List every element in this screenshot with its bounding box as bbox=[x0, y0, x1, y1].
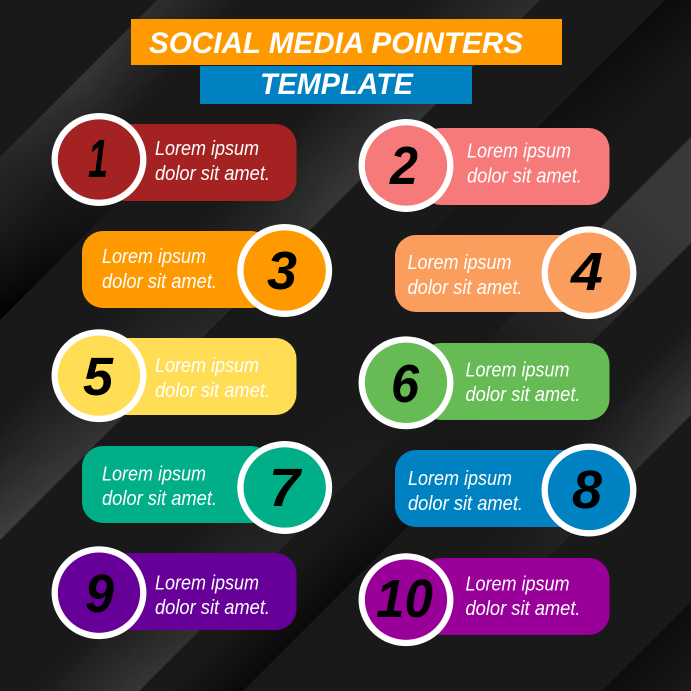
pointer 6 bbox=[362, 340, 610, 426]
pointer 2: Lorem ipsum bbox=[467, 140, 571, 162]
pointer 8: Lorem ipsum bbox=[408, 468, 512, 490]
pointer 5: Lorem ipsum bbox=[155, 355, 259, 377]
pointer 5: dolor sit amet. bbox=[155, 380, 270, 402]
title banner bbox=[131, 19, 562, 65]
pointer 3: Lorem ipsum bbox=[102, 246, 206, 268]
pointer 4: Lorem ipsum bbox=[408, 252, 512, 274]
pointer 10: dolor sit amet. bbox=[466, 598, 580, 620]
pointer 3: dolor sit amet. bbox=[102, 271, 217, 293]
pointer 3: 3 bbox=[267, 241, 297, 301]
pointer 7: 7 bbox=[269, 458, 303, 518]
pointer 8: 8 bbox=[572, 460, 602, 520]
pointer 5: 5 bbox=[83, 347, 114, 407]
pointer 1: Lorem ipsum bbox=[155, 138, 259, 160]
pointer 8 bbox=[395, 447, 633, 533]
title banner: SOCIAL MEDIA POINTERS bbox=[149, 27, 523, 60]
subtitle banner: TEMPLATE bbox=[260, 68, 414, 101]
pointer 10 bbox=[362, 556, 610, 643]
pointer 4 bbox=[395, 229, 633, 316]
pointer 2 bbox=[362, 122, 610, 209]
pointer 4: dolor sit amet. bbox=[408, 277, 522, 299]
pointer 2: 2 bbox=[389, 136, 418, 196]
pointer 3 bbox=[82, 227, 329, 314]
pointer 7: Lorem ipsum bbox=[102, 464, 206, 486]
pointer 1 bbox=[55, 116, 297, 203]
pointer 6: dolor sit amet. bbox=[466, 384, 580, 406]
pointer 9: 9 bbox=[85, 564, 114, 624]
pointer 9: Lorem ipsum bbox=[155, 572, 259, 594]
pointer 2: dolor sit amet. bbox=[467, 166, 582, 188]
subtitle banner bbox=[200, 66, 472, 104]
pointer 10: 10 bbox=[376, 569, 433, 629]
pointer 7 bbox=[82, 444, 329, 531]
pointer 1: 1 bbox=[88, 129, 108, 189]
pointer 4: 4 bbox=[570, 242, 603, 302]
pointer 9 bbox=[55, 549, 297, 636]
pointer 5 bbox=[55, 332, 297, 419]
pointer 10: Lorem ipsum bbox=[466, 574, 570, 596]
pointer 8: dolor sit amet. bbox=[408, 493, 523, 515]
pointer 7: dolor sit amet. bbox=[102, 488, 217, 510]
pointer 6: 6 bbox=[391, 354, 420, 414]
pointer 1: dolor sit amet. bbox=[155, 163, 270, 185]
pointer 6: Lorem ipsum bbox=[466, 360, 570, 382]
pointer 9: dolor sit amet. bbox=[155, 597, 270, 619]
